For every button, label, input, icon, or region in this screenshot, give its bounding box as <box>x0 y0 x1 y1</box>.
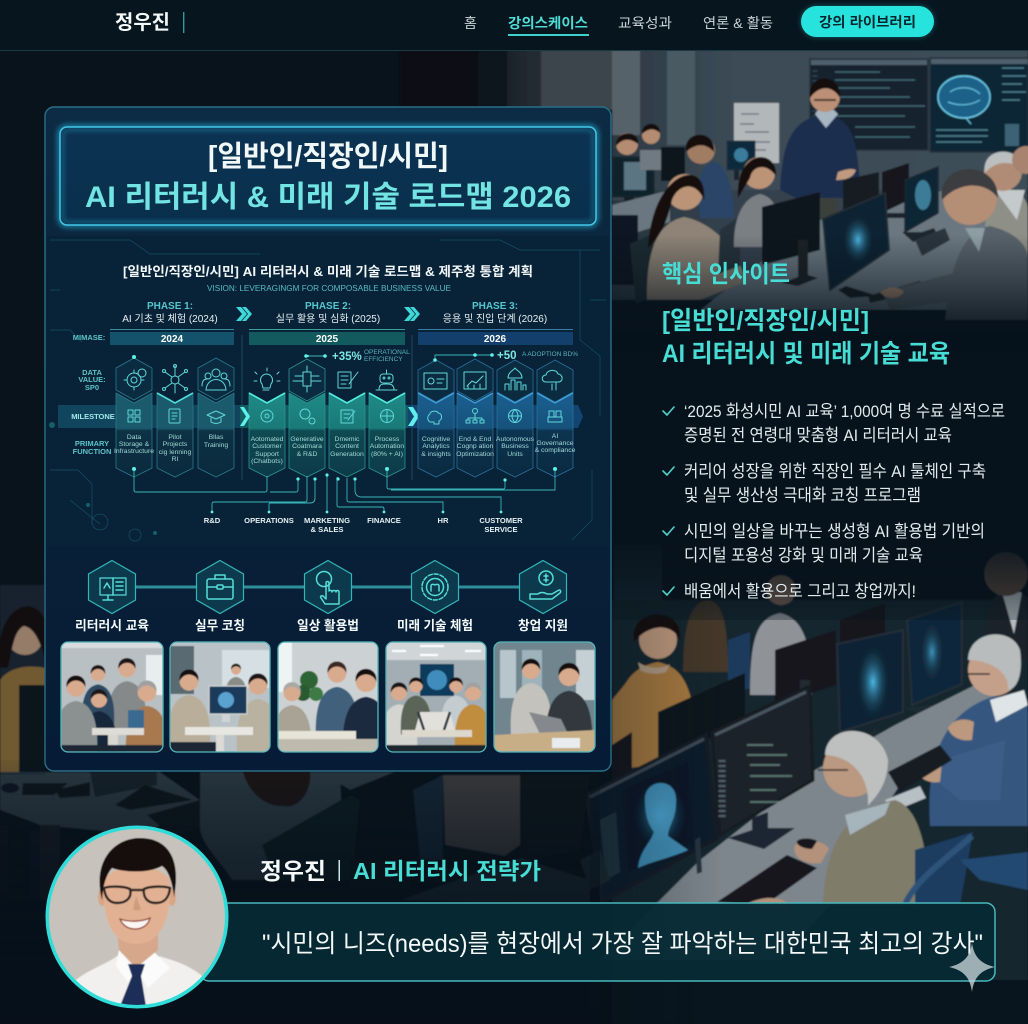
department labels: HR <box>438 516 449 525</box>
bullet 1 <box>663 402 1005 445</box>
phase 3 functions <box>421 433 576 458</box>
kpi +35%: +35% <box>332 351 362 363</box>
phase 3 functions: Business <box>501 443 529 450</box>
phase 2 functions: Content <box>335 443 359 450</box>
upper right older men <box>880 146 1028 320</box>
upper monitors <box>762 163 950 303</box>
photo: startup support <box>494 642 595 752</box>
kpi +35%: OPERATIONAL <box>364 349 410 356</box>
library button <box>801 6 934 37</box>
phase 3 functions: Units <box>507 451 523 458</box>
bullet 2 <box>663 462 986 505</box>
phase 3 functions: & insights <box>421 451 451 458</box>
nav: lecture space: 강의스케이스 <box>508 15 588 31</box>
title box <box>60 127 596 225</box>
circuit decoration <box>49 240 606 541</box>
row labels: MIMASE: <box>73 333 105 342</box>
service labels: 실무 코칭 <box>195 618 245 633</box>
title line 1: [일반인/직장인/시민] <box>208 140 448 173</box>
kpi +50 <box>433 350 578 362</box>
phase 2 heading: PHASE 2: <box>305 301 351 312</box>
phase 1 functions: Data <box>127 434 141 441</box>
phase 1 heading <box>122 301 218 325</box>
lower right suited man <box>984 552 1028 660</box>
icon: org chart <box>466 408 484 423</box>
icon: edit document <box>338 372 358 388</box>
year bar 2026 <box>418 329 573 345</box>
quote text: "시민의 니즈(needs)를 현장에서 가장 잘 파악하는 대한민국 최고의 강사" <box>262 930 983 958</box>
arrow: phase 1 to 2 <box>236 307 252 321</box>
phase 2 functions: Coatmara <box>292 443 322 450</box>
phase 3 functions: Cognp ation <box>457 443 494 450</box>
icon: robot <box>376 370 397 390</box>
photo: daily use <box>277 641 379 753</box>
far-row students <box>612 124 755 218</box>
diagram heading: [일반인/직장인/시민] AI 리터러시 & 미래 기술 로드맵 & 제주청 통합 계획 <box>123 264 533 279</box>
bullet 2: 및 실무 생산성 극대화 코칭 프로그램 <box>684 486 921 505</box>
icon: light bulb <box>254 368 280 390</box>
year bar 2025 <box>249 329 405 345</box>
speaker name and role: AI 리터러시 전략가 <box>353 858 541 884</box>
vision line: VISION: LEVERAGINGM FOR COMPOSABLE BUSINESS VALUE <box>207 283 451 293</box>
bullet 3: 디지털 포용성 강화 및 미래 기술 교육 <box>684 546 923 565</box>
phase 2 functions: Aotomated <box>251 436 284 443</box>
whiteboard <box>734 103 779 163</box>
service labels: 미래 기술 체험 <box>397 618 473 633</box>
phase 2 functions: Generation <box>330 451 364 458</box>
department labels: CUSTOMER <box>479 516 523 525</box>
icon: graduation cap <box>207 411 225 424</box>
service labels: 일상 활용법 <box>297 618 359 633</box>
photo: literacy class <box>60 641 164 753</box>
phase 2 heading: 실무 활용 및 심화 (2025) <box>276 312 380 325</box>
bullet 1: 증명된 전 연령대 맞춤형 AI 리터러시 교육 <box>684 426 952 445</box>
older man in blue sweater <box>885 634 1028 826</box>
icon: document <box>169 409 180 423</box>
roadmap infographic <box>47 236 609 546</box>
mid row dim <box>614 545 662 615</box>
nav: results: 교육성과 <box>618 15 672 31</box>
wall screens <box>810 58 1028 152</box>
glasses <box>104 887 170 903</box>
face <box>104 866 170 944</box>
phase 2 functions: Dmemic <box>335 436 360 443</box>
tie <box>120 964 146 1006</box>
kpi +50: +50 <box>497 350 517 362</box>
phase 1 functions: Storage & <box>119 441 150 448</box>
woman in light top <box>750 575 812 695</box>
icon: form edit <box>341 410 355 423</box>
nose <box>133 896 141 910</box>
back wall strip behind nav <box>400 50 612 110</box>
year bar 2024 <box>110 329 234 345</box>
phase 2 functions: Support <box>255 451 279 458</box>
lower monitors <box>775 602 962 752</box>
row labels <box>71 333 115 456</box>
year bar 2024: 2024 <box>161 334 184 345</box>
phase 1 functions: RI <box>172 456 179 463</box>
kpi +35% <box>304 349 410 363</box>
milestone band <box>58 405 583 428</box>
speaker portrait <box>46 826 228 1010</box>
icon: search gear <box>300 409 315 424</box>
service labels: 창업 지원 <box>518 618 568 633</box>
department labels: OPERATIONS <box>244 516 294 525</box>
phase 2 functions: Process <box>375 436 400 443</box>
phase 2 functions <box>251 436 404 465</box>
back wall <box>612 50 1028 300</box>
insight heading <box>662 307 950 368</box>
phase 3 functions: Autonomous <box>496 436 535 443</box>
icon: hand with coin <box>520 560 566 614</box>
department labels: & SALES <box>311 525 343 534</box>
icon: gears <box>124 369 146 390</box>
phase 3 heading <box>443 301 547 325</box>
nav: talks: 연론 & 활동 <box>703 15 773 31</box>
department labels <box>204 516 523 534</box>
quote box <box>200 903 995 992</box>
young man in mustard sweater <box>612 614 698 770</box>
phase 3 functions: End & End <box>459 436 491 443</box>
right chair <box>960 852 1028 890</box>
icon: literacy <box>88 560 136 614</box>
phase 3 heading: PHASE 3: <box>472 301 518 312</box>
phase 2 functions: & R&D <box>297 451 317 458</box>
icon: sparkle <box>949 943 995 992</box>
phase 3 functions: Optimization <box>456 451 494 458</box>
title line 2: AI 리터러시 & 미래 기술 로드맵 2026 <box>85 181 571 214</box>
icon: dashboard <box>424 373 447 389</box>
icon: globe <box>380 410 394 422</box>
icon: chip grid <box>128 410 140 422</box>
phase 1 functions: Projects <box>163 441 188 448</box>
panel: key insight <box>662 261 1005 601</box>
phase 2 functions: Generative <box>290 436 324 443</box>
lower center students <box>200 772 610 905</box>
phase 3 functions: & compliance <box>535 447 576 454</box>
shirt <box>76 954 202 1004</box>
year bar 2026: 2026 <box>484 334 507 345</box>
phase 1 functions: Infrastructure <box>114 448 154 455</box>
phase 1 functions: Pilot <box>168 434 182 441</box>
photo: future tech <box>381 642 491 752</box>
department labels: R&D <box>204 516 221 525</box>
icon: people group <box>202 369 230 390</box>
neck <box>118 934 158 965</box>
service labels: 리터러시 교육 <box>75 618 149 633</box>
icon: world network <box>508 410 522 422</box>
row labels: SP0 <box>85 383 99 392</box>
phase 1 functions: Training <box>204 442 228 449</box>
row labels: PRIMARY <box>75 439 109 448</box>
lower desk <box>600 680 1000 960</box>
department labels: FINANCE <box>367 516 401 525</box>
lower left desks <box>0 772 200 900</box>
upper students <box>612 157 780 304</box>
library button: 강의 라이브러리 <box>819 14 916 30</box>
phase 3 functions: AI <box>552 433 558 440</box>
arrow: phase 2 to 3 <box>404 307 420 321</box>
foreground monitors <box>587 673 813 902</box>
phase 1 functions <box>114 434 228 463</box>
speaker name and role <box>260 858 541 884</box>
icon: building bars <box>505 368 526 390</box>
bullet 3 <box>663 522 985 565</box>
panel: roadmap card <box>45 107 611 771</box>
department labels: MARKETING <box>304 516 350 525</box>
phase 1 heading: AI 기초 및 체험 (2024) <box>122 313 218 325</box>
icon: touch hand <box>304 560 352 614</box>
insight label: 핵심 인사이트 <box>662 261 790 288</box>
icon: ai gear <box>412 560 458 614</box>
row labels: VALUE: <box>78 375 106 384</box>
mouth <box>120 918 150 929</box>
phase 2 columns <box>249 349 410 477</box>
arrow: band chevrons <box>240 407 419 426</box>
icon: cloud <box>542 370 562 390</box>
icon: network node <box>162 364 188 393</box>
insight heading: AI 리터러시 및 미래 기술 교육 <box>662 340 950 368</box>
row labels: MILESTONE <box>71 412 115 421</box>
phase 1 columns <box>114 358 234 477</box>
instructor <box>780 78 860 225</box>
icon: gear face <box>261 410 273 422</box>
student in blue <box>699 162 734 218</box>
phase 2 functions: (80% + AI) <box>371 451 403 458</box>
hair <box>100 838 176 900</box>
service labels <box>75 618 568 633</box>
bullet 2: 커리어 성장을 위한 직장인 필수 AI 툴체인 구축 <box>684 462 986 481</box>
bullet 3: 시민의 일상을 바꾸는 생성형 AI 활용법 기반의 <box>684 522 985 541</box>
brown student and blue chair <box>683 600 750 696</box>
phase 2 functions: (Chatbots) <box>251 458 283 465</box>
photo: coaching <box>168 642 279 754</box>
phase 3 columns <box>418 350 578 477</box>
left student in mustard <box>0 585 45 775</box>
phase 1 heading: PHASE 1: <box>147 301 193 312</box>
icon: ai spark node <box>293 366 321 392</box>
phase 3 heading: 응용 및 진입 단계 (2026) <box>443 312 547 325</box>
kpi +35%: EFFICIENCY <box>364 356 403 363</box>
speaker name and role: 정우진 <box>260 858 326 884</box>
top navigation bar <box>0 0 1028 51</box>
nav: home: 홈 <box>464 15 477 31</box>
phase 1 functions: cig lenning <box>159 449 191 456</box>
icon: shield group <box>548 411 562 422</box>
logo divider <box>183 12 184 33</box>
phase 3 functions: Cognitive <box>422 436 450 443</box>
phase 3 functions: Analytics <box>422 443 450 450</box>
phase 3 functions: Governance <box>536 440 574 447</box>
icon: brain <box>428 411 442 424</box>
row labels: FUNCTION <box>73 447 111 456</box>
kpi +50: A ADOPTION BD% <box>522 351 578 358</box>
phase separators <box>242 335 412 480</box>
logo name: 정우진 <box>115 11 170 34</box>
row labels: DATA <box>82 368 102 377</box>
year bar 2025: 2025 <box>316 334 339 345</box>
upper desks <box>612 190 1028 310</box>
foreground older man <box>717 731 973 906</box>
ears <box>98 890 105 906</box>
department labels: SERVICE <box>484 525 518 534</box>
phase 2 functions: Customer <box>252 443 282 450</box>
phase 2 heading <box>276 301 380 325</box>
lower dark floor <box>612 600 1028 1024</box>
phase 2 functions: Automation <box>370 443 404 450</box>
icon: briefcase <box>196 560 244 614</box>
bullet 4: 배움에서 활용으로 그리고 창업까지! <box>684 582 916 601</box>
icon: chart <box>464 372 486 389</box>
service icon row <box>88 560 566 614</box>
connector wires <box>134 470 555 513</box>
phase 1 functions: Bllas <box>209 434 224 441</box>
darkening overlays <box>0 235 1028 1024</box>
insight heading: [일반인/직장인/시민] <box>662 307 869 335</box>
milestone glow dots <box>132 355 557 471</box>
